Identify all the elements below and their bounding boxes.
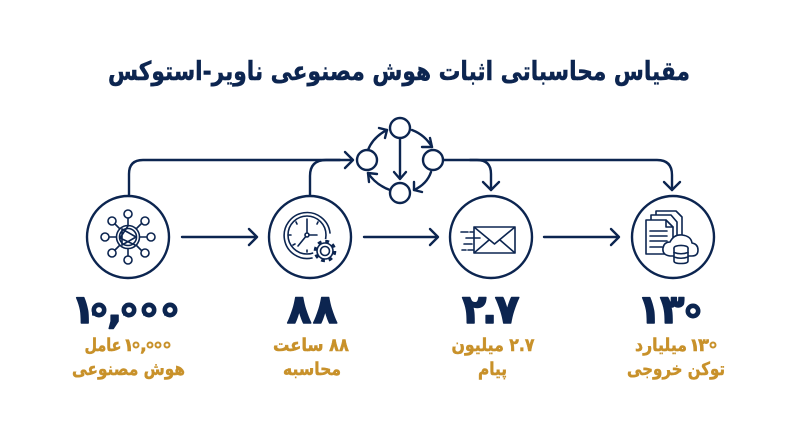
label: 10,000 AI agents: ۱۰,۰۰۰ [123,335,172,356]
icon: AI network [101,210,155,264]
panel: step 2 node [269,196,351,278]
label: 130 billion output tokens: توکن خروجی [627,359,725,380]
arrow: step 2 to 3 [364,229,438,245]
stat: 10,000: ۱۰,۰۰۰ [71,287,180,333]
title: مقیاس محاسباتی اثبات هوش مصنوعی ناویر-استوکس [108,57,690,87]
stat: 2.7: ۲.۷ [462,287,519,333]
label: 130 billion output tokens: ۱۳۰ [689,335,718,356]
label: 10,000 AI agents [72,335,185,380]
stat: 130: ۱۳۰ [637,287,703,333]
label: 88 compute hours [273,335,349,380]
arrow: step 1 to 2 [182,229,257,245]
panel: step 1 node [87,196,169,278]
label: 10,000 AI agents: هوش مصنوعی [72,359,185,380]
label: 88 compute hours: محاسبه [283,359,341,380]
label: 130 billion output tokens [627,335,725,380]
arrow: step 3 to 4 [544,229,619,245]
icon: envelope [461,227,515,253]
label: 88 compute hours: ۸۸ ساعت [273,335,349,356]
icon: documents and cloud database [646,211,698,264]
icon: cycle diagram [357,118,443,203]
label: 2.7 million messages [452,335,535,380]
label: 130 billion output tokens: میلیارد [635,335,687,356]
label: 2.7 million messages: ۲.۷ میلیون [452,335,535,356]
panel: step 3 node [450,196,532,278]
label: 2.7 million messages: پیام [478,359,507,380]
stat: 88: ۸۸ [287,287,337,333]
icon: clock and gear [284,213,337,263]
label: 10,000 AI agents: عامل [84,335,122,356]
connector arrows: top flow [129,152,680,196]
panel: step 4 node [632,196,714,278]
